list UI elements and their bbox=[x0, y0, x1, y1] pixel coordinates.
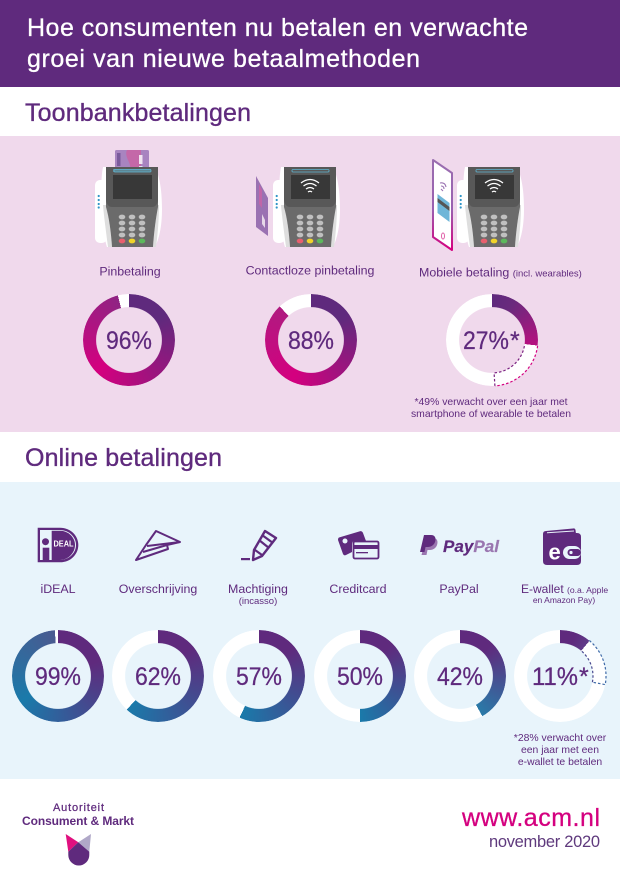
donut: 57%: 57% bbox=[236, 663, 282, 691]
label: E-wallet: E-wallet (o.a. Apple bbox=[521, 582, 608, 596]
icon: contactloze terminal bbox=[256, 167, 340, 247]
title bbox=[27, 14, 528, 73]
label: Contactloze pinbetaling: Contactloze pinbetaling bbox=[246, 264, 375, 278]
date: november 2020 bbox=[489, 833, 600, 851]
donut: 42%: 42% bbox=[437, 663, 483, 691]
note: e-wallet bbox=[514, 733, 607, 768]
donut: 99%: 99% bbox=[35, 663, 81, 691]
donut: 62% bbox=[112, 630, 204, 722]
donut: 11% met verwachting: * bbox=[579, 663, 589, 691]
heading: Online betalingen: Online betalingen bbox=[25, 444, 222, 472]
icon: iDEAL bbox=[38, 528, 78, 562]
donut: 96%: 96% bbox=[106, 327, 152, 355]
logo: Autoriteit Consument & Markt: Autoriteit bbox=[53, 802, 104, 814]
donut: 27% met verwachting bbox=[446, 294, 538, 386]
label: Pinbetaling: Pinbetaling bbox=[99, 264, 161, 278]
icon: creditcard bbox=[338, 531, 378, 558]
label: Machtiging: (incasso) bbox=[239, 596, 277, 607]
label: Machtiging: Machtiging bbox=[228, 582, 288, 596]
label: E-wallet: en Amazon Pay) bbox=[533, 595, 595, 605]
note: e-wallet: e-wallet te betalen bbox=[518, 757, 602, 768]
logo: Autoriteit Consument & Markt bbox=[22, 802, 134, 866]
icon: iDEAL: DEAL bbox=[54, 540, 74, 548]
website: www.acm.nl bbox=[461, 804, 600, 832]
panel: online betalingen bbox=[0, 482, 620, 779]
icon: mobiele betaling terminal met telefoon bbox=[433, 160, 524, 250]
label: Machtiging bbox=[228, 582, 288, 607]
logo: Autoriteit Consument & Markt: Consument & Markt bbox=[22, 814, 134, 828]
donut: 11% met verwachting bbox=[514, 630, 607, 722]
icon: e-wallet bbox=[543, 528, 581, 565]
icon: PayPal bbox=[420, 535, 500, 556]
donut: 57% bbox=[213, 630, 305, 722]
icon: PayPal: PayPal bbox=[443, 537, 500, 556]
donut: 42% bbox=[414, 630, 506, 722]
note: mobiele betaling bbox=[411, 397, 571, 420]
label: PayPal: PayPal bbox=[439, 582, 479, 596]
label: Overschrijving: Overschrijving bbox=[119, 582, 197, 596]
header band bbox=[0, 0, 620, 87]
label: E-wallet bbox=[521, 582, 608, 605]
donut: 99% bbox=[12, 630, 104, 722]
donut: 11% met verwachting: 11% bbox=[532, 663, 578, 691]
icon: pinbetaling terminal bbox=[95, 150, 162, 247]
donut: 50%: 50% bbox=[337, 663, 383, 691]
donut: 27% met verwachting: * bbox=[510, 327, 520, 355]
donut: 27% met verwachting: 27% bbox=[463, 327, 509, 355]
label: Creditcard: Creditcard bbox=[329, 582, 387, 596]
note: e-wallet: *28% verwacht over bbox=[514, 733, 607, 744]
footer bbox=[22, 802, 600, 866]
donut: 88%: 88% bbox=[288, 327, 334, 355]
note: mobiele betaling: *49% verwacht over een jaar met bbox=[414, 397, 568, 408]
title: Hoe consumenten nu betalen en verwachte bbox=[27, 14, 528, 42]
label: iDEAL: iDEAL bbox=[40, 582, 76, 596]
note: mobiele betaling: smartphone of wearable te betalen bbox=[411, 409, 571, 420]
donut: 96% bbox=[83, 294, 175, 386]
heading: Toonbankbetalingen: Toonbankbetalingen bbox=[25, 99, 251, 127]
donut: 50% bbox=[314, 630, 406, 722]
donut: 88% bbox=[265, 294, 357, 386]
icon: pen bbox=[241, 531, 276, 560]
donut: 62%: 62% bbox=[135, 663, 181, 691]
title: groei van nieuwe betaalmethoden bbox=[27, 45, 420, 73]
label: Mobiele betaling: Mobiele betaling (incl. wearables) bbox=[419, 266, 582, 280]
panel: toonbankbetalingen bbox=[0, 136, 620, 432]
icon: e-wallet: e bbox=[548, 540, 561, 564]
note: e-wallet: een jaar met een bbox=[521, 745, 599, 756]
icon: papieren vliegtuig bbox=[136, 531, 180, 560]
